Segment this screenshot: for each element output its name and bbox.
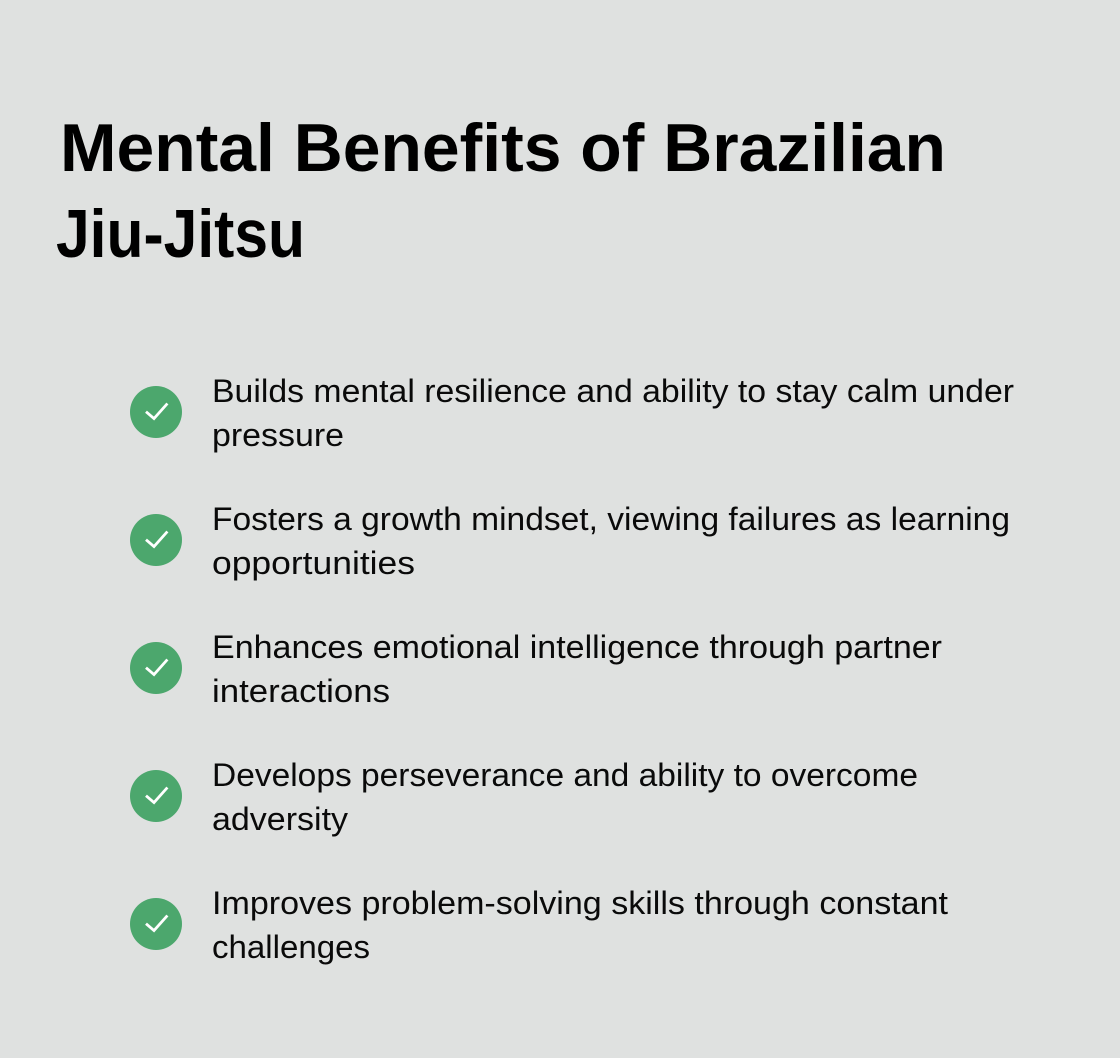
benefit text 2 bbox=[212, 501, 1010, 581]
benefit text 5: challenges bbox=[212, 929, 370, 965]
benefit text 5: Improves problem-solving skills through constant bbox=[212, 885, 948, 921]
benefit item 2 bbox=[130, 501, 1010, 581]
benefit text 4: adversity bbox=[212, 801, 348, 837]
benefit item 1 bbox=[130, 373, 1014, 453]
benefit text 2: opportunities bbox=[212, 545, 415, 581]
benefit text 3: Enhances emotional intelligence through partner bbox=[212, 629, 942, 665]
benefit text 1: pressure bbox=[212, 417, 344, 453]
benefit text 5 bbox=[212, 885, 948, 965]
benefit item 3 bbox=[130, 629, 942, 709]
title bbox=[56, 110, 946, 272]
benefit text 4: Develops perseverance and ability to overcome bbox=[212, 757, 918, 793]
benefit text 1 bbox=[212, 373, 1014, 453]
benefits list bbox=[130, 373, 1014, 965]
icon: green check circle bbox=[130, 642, 182, 694]
benefit text 3: interactions bbox=[212, 673, 390, 709]
title: Mental Benefits of Brazilian bbox=[60, 110, 946, 186]
benefit text 3 bbox=[212, 629, 942, 709]
icon: green check circle bbox=[130, 898, 182, 950]
title: Jiu-Jitsu bbox=[56, 196, 305, 272]
benefit item 4 bbox=[130, 757, 918, 837]
benefit text 1: Builds mental resilience and ability to stay calm under bbox=[212, 373, 1014, 409]
benefit text 4 bbox=[212, 757, 918, 837]
icon: green check circle bbox=[130, 386, 182, 438]
icon: green check circle bbox=[130, 514, 182, 566]
benefit item 5 bbox=[130, 885, 948, 965]
benefit text 2: Fosters a growth mindset, viewing failures as learning bbox=[212, 501, 1010, 537]
icon: green check circle bbox=[130, 770, 182, 822]
